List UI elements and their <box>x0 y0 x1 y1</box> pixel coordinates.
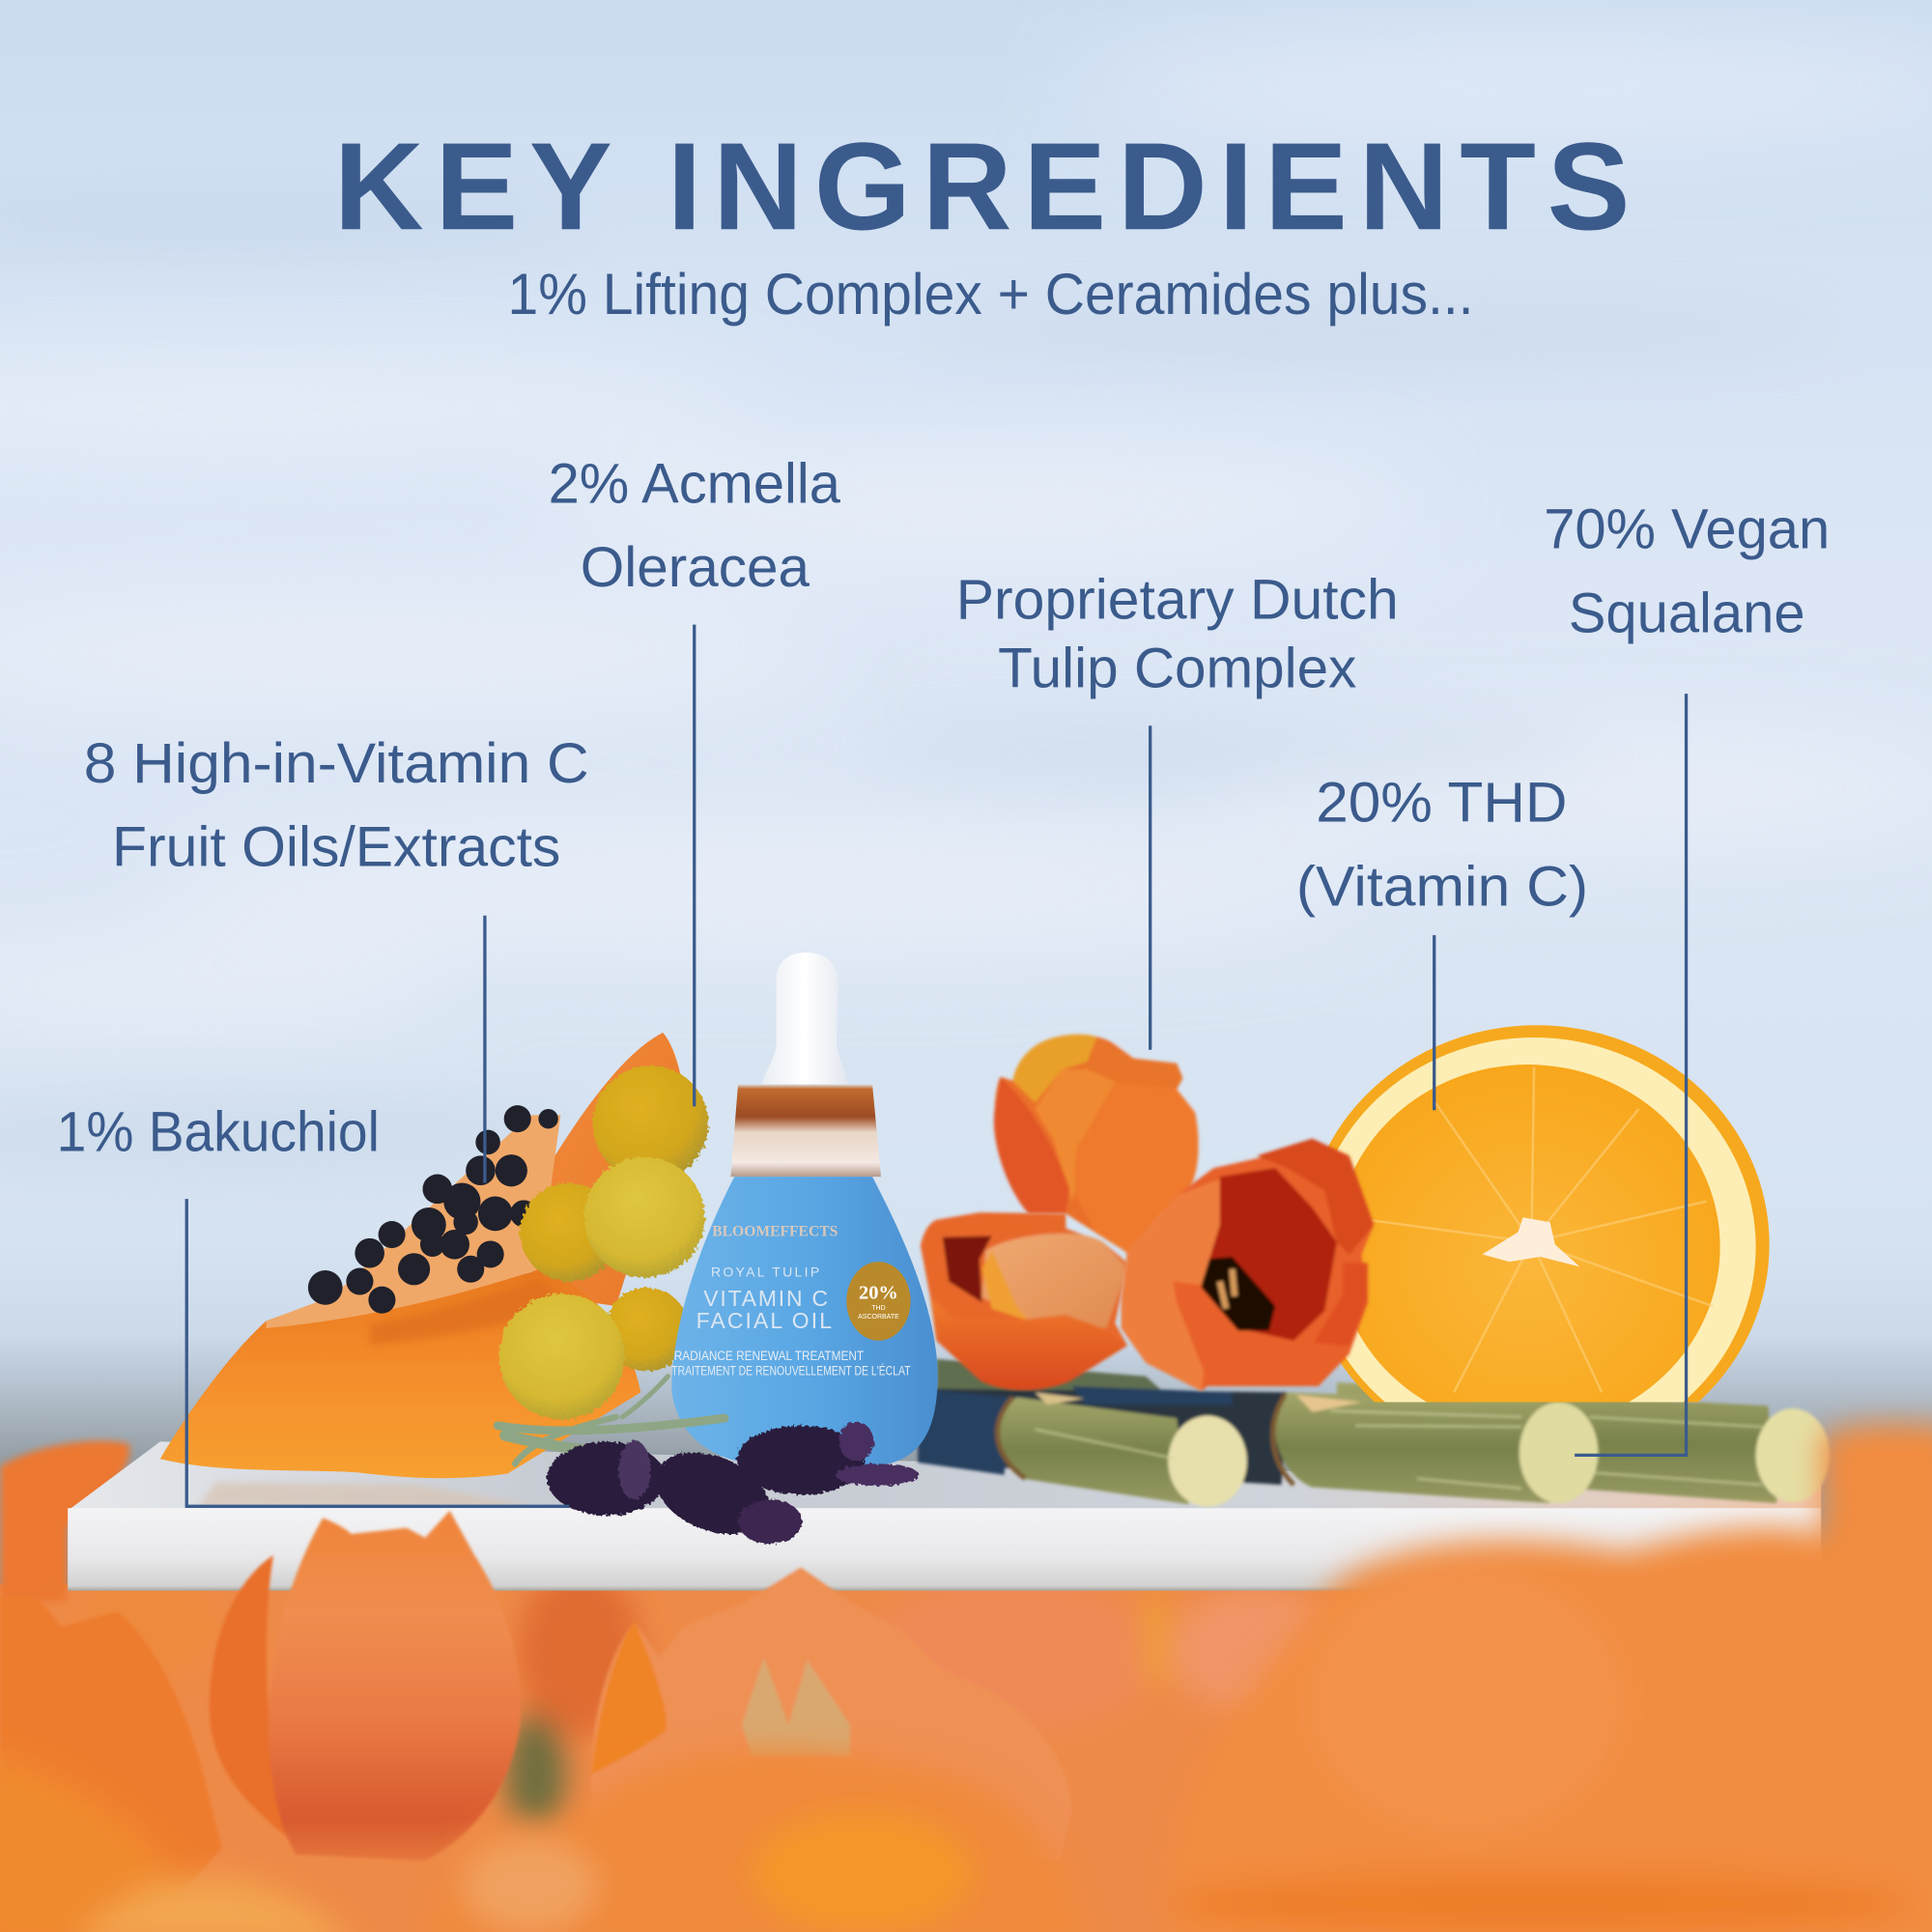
label: Proprietary Dutch Tulip Complex: Tulip Complex <box>998 638 1356 700</box>
dropper bottle <box>671 952 938 1466</box>
title: KEY INGREDIENTS <box>334 117 1631 256</box>
bottle label: VITAMIN C <box>703 1286 828 1311</box>
foreground tulips left group <box>0 1511 521 1932</box>
label: 8 High-in-Vitamin C Fruit Oils/Extracts: Fruit Oils/Extracts <box>112 816 560 879</box>
tulip: right open <box>1122 1139 1374 1391</box>
orange slice <box>1327 1025 1770 1403</box>
dropper bulb <box>761 952 848 1084</box>
label: 2% Acmella Oleracea <box>549 452 840 599</box>
bottle label: RADIANCE RENEWAL TREATMENT <box>674 1349 864 1363</box>
label: 20% THD (Vitamin C): (Vitamin C) <box>1296 855 1588 918</box>
foreground blurred tulips <box>0 1423 1932 1932</box>
gold badge: THD <box>871 1305 886 1312</box>
bottle label: BLOOMEFFECTS <box>712 1223 838 1239</box>
label: 2% Acmella Oleracea: Oleracea <box>581 536 810 599</box>
label: Proprietary Dutch Tulip Complex: Proprietary Dutch <box>956 568 1399 631</box>
tulip: closed bud <box>994 1035 1199 1254</box>
gold badge <box>846 1262 911 1341</box>
metal collar <box>730 1084 881 1177</box>
line: 1% Bakuchiol <box>186 1199 569 1506</box>
papaya <box>160 1033 684 1478</box>
tulip: left open <box>921 1212 1127 1390</box>
gold badge: ASCORBATE <box>858 1314 899 1321</box>
subtitle: 1% Lifting Complex + Ceramides plus... <box>508 262 1474 327</box>
line: THD <box>1433 935 1435 1110</box>
papaya seeds <box>308 1105 558 1314</box>
line: 8 fruit oils <box>484 916 486 1182</box>
line: squalane <box>1575 694 1687 1455</box>
label: 20% THD (Vitamin C): 20% THD <box>1316 772 1567 835</box>
bottle label: TRAITEMENT DE RENOUVELLEMENT DE L'ÉCLAT <box>671 1363 911 1378</box>
label: Proprietary Dutch Tulip Complex <box>956 568 1399 700</box>
bottle label: ROYAL TULIP <box>711 1264 819 1279</box>
label: 20% THD (Vitamin C) <box>1296 772 1588 918</box>
bottle label <box>671 1223 911 1378</box>
label: 70% Vegan Squalane <box>1544 498 1830 644</box>
label: 8 High-in-Vitamin C Fruit Oils/Extracts: 8 High-in-Vitamin C <box>84 732 589 795</box>
bottle label: FACIAL OIL <box>696 1308 832 1333</box>
label: 70% Vegan Squalane: 70% Vegan <box>1544 498 1830 561</box>
line: tulip complex <box>1149 725 1151 1050</box>
lavender sprigs <box>497 1377 920 1549</box>
marble slab <box>68 1441 1821 1591</box>
label: 70% Vegan Squalane: Squalane <box>1569 582 1805 644</box>
callout lines <box>186 625 1687 1506</box>
label: 8 High-in-Vitamin C Fruit Oils/Extracts <box>84 732 589 879</box>
gold badge: 20% <box>859 1282 898 1303</box>
blue bottle body <box>671 1177 938 1466</box>
yellow craspedia balls <box>499 1065 708 1419</box>
line: acmella <box>693 625 696 1106</box>
background tulip field <box>0 1440 1932 1932</box>
foreground tulip centre <box>591 1567 1072 1861</box>
sugar cane <box>918 1359 1830 1507</box>
label: 1% Bakuchiol: 1% Bakuchiol <box>57 1100 380 1163</box>
label: 2% Acmella Oleracea: 2% Acmella <box>549 452 840 515</box>
